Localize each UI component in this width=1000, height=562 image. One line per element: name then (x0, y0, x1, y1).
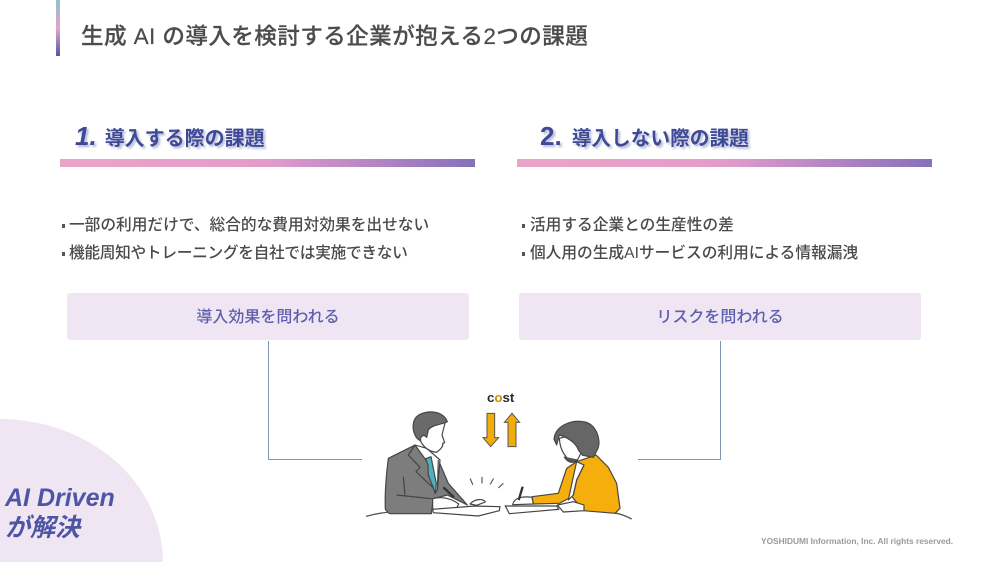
table edge lines (366, 512, 632, 519)
slogan: AI Driven: AI Driven (5, 484, 115, 512)
callout 1 (67, 293, 469, 340)
callout 2: リスクを問われる (656, 309, 784, 326)
callout 2 (519, 293, 921, 340)
bullet list 2: 活用する企業との生産性の差 (530, 217, 734, 234)
title accent bar (56, 0, 60, 56)
heading underline 2 (517, 159, 932, 167)
slogan: AI Driven: が解決 (5, 514, 80, 542)
bullet list 2 (522, 216, 858, 262)
bullet list 2: 個人用の生成AIサービスの利用による情報漏洩 (530, 245, 858, 262)
heading: challenge 2: 2. 導入しない際の課題 (540, 121, 749, 151)
connector left (268, 341, 362, 460)
document woman (505, 506, 559, 514)
heading: challenge 1: 1. 導入する際の課題 (75, 121, 265, 151)
callout 1: 導入効果を問われる (196, 309, 340, 326)
connector right (638, 341, 721, 460)
bullet list 1: 一部の利用だけで、総合的な費用対効果を出せない (69, 217, 429, 234)
man (385, 412, 485, 514)
surprise marks (470, 477, 503, 488)
label: cost: cost (487, 390, 515, 405)
document man (433, 506, 500, 516)
title: 生成 AI の導入を検討する企業が抱える2つの課題 (81, 24, 588, 49)
heading underline 1 (60, 159, 475, 167)
arrow up (504, 413, 520, 447)
bullet list 1: 機能周知やトレーニングを自社では実施できない (69, 245, 408, 262)
decorative quarter circle (0, 419, 163, 562)
slogan: AI Driven (4, 484, 115, 542)
illustration: two people discussing cost (366, 390, 632, 520)
arrow down (483, 413, 499, 447)
woman (513, 421, 620, 513)
bullet list 1 (62, 216, 429, 262)
copyright: YOSHIDUMI Information, Inc. All rights reserved. (761, 536, 953, 546)
